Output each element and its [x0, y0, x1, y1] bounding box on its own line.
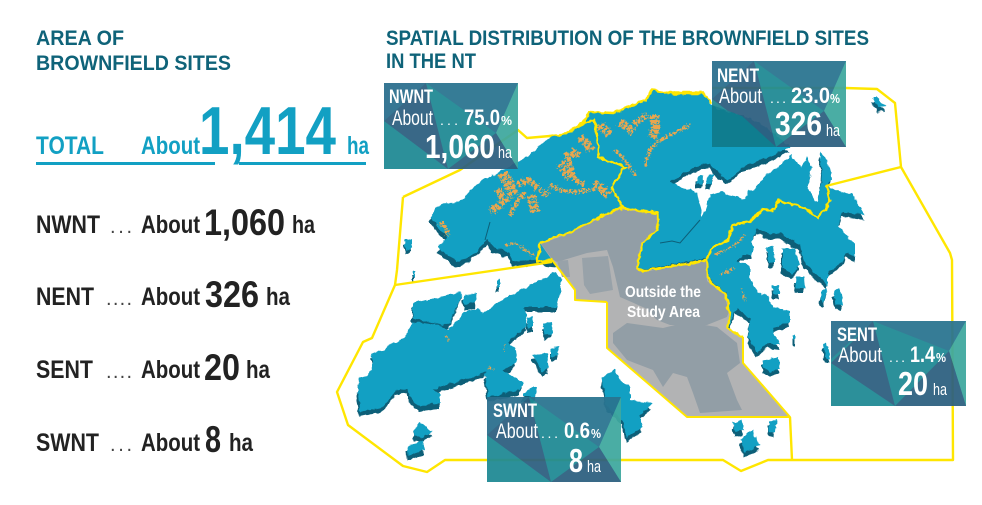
callout: NWNT: ...	[440, 112, 458, 128]
list row: NWNT: NWNT	[36, 211, 100, 239]
list row: SWNT: About	[141, 429, 201, 457]
map: area outside the study area	[540, 208, 790, 417]
callout: NWNT: %	[501, 113, 512, 128]
callout: SENT: %	[936, 350, 946, 365]
callout: NENT: About	[719, 85, 762, 108]
list row: NENT: About	[141, 283, 201, 311]
list row: NWNT	[36, 202, 316, 243]
total area figure: About	[141, 132, 201, 160]
list row: SENT: ....	[106, 361, 132, 383]
list row: SENT: About	[141, 356, 201, 384]
callout: SWNT	[487, 397, 621, 482]
callout: NWNT	[384, 83, 518, 169]
callout: NENT: 326	[775, 105, 822, 142]
list row: NWNT: ...	[110, 216, 132, 238]
map: land with shadow	[356, 90, 886, 461]
callout: SENT: About	[838, 344, 882, 367]
total area figure: 1,414	[199, 93, 336, 169]
list row: SENT: SENT	[36, 356, 93, 384]
map: inner rough yellow boundaries	[537, 90, 830, 337]
list row: SENT: ha	[246, 356, 271, 384]
callout: SWNT: About	[496, 420, 538, 443]
list row: NENT: 326	[205, 274, 259, 315]
callout: NENT: ...	[770, 90, 786, 106]
callout: NWNT: 1,060	[425, 128, 495, 165]
callout: SENT: 1.4	[910, 342, 936, 367]
callout: NENT: NENT	[717, 65, 759, 87]
callout: NENT: ha	[826, 121, 840, 140]
callout: SENT: 20	[898, 365, 928, 402]
list row: SENT	[36, 347, 271, 388]
callout: NENT	[712, 61, 846, 147]
list row: NENT: NENT	[36, 283, 94, 311]
callout: SWNT: 0.6	[564, 418, 590, 443]
map: brownfield site speckles	[440, 115, 745, 370]
list row: NWNT: ha	[292, 211, 316, 239]
map of the New Territories	[337, 88, 953, 472]
callout: NENT: 23.0	[791, 83, 830, 108]
list row: SWNT: 8	[205, 419, 221, 460]
heading: area of brownfield sites: AREA OF	[36, 27, 124, 50]
list row: SWNT	[36, 419, 254, 460]
callout: SENT: SENT	[837, 324, 877, 346]
map: outer yellow boundaries	[337, 88, 953, 472]
list row: NENT: ha	[266, 283, 291, 311]
callout: SWNT: %	[591, 426, 601, 441]
heading: spatial distribution: IN THE NT	[386, 50, 476, 73]
callout: NWNT: ha	[498, 143, 512, 162]
callout: SENT: ...	[889, 349, 905, 365]
map label: outside the study area: Study Area	[627, 304, 700, 321]
list row: SENT: 20	[204, 347, 240, 388]
list row: SWNT: SWNT	[36, 429, 99, 457]
total area figure: TOTAL	[36, 132, 104, 160]
heading: area of brownfield sites: BROWNFIELD SITES	[36, 52, 231, 75]
heading: area of brownfield sites	[36, 27, 231, 75]
list row: SWNT: ha	[229, 429, 254, 457]
callout: NWNT: About	[392, 107, 433, 130]
callout: SWNT: ha	[587, 457, 601, 476]
callout: SENT	[831, 321, 966, 406]
map: drainage lines	[485, 220, 700, 243]
map label: outside the study area: Outside the	[625, 284, 701, 301]
heading: spatial distribution: SPATIAL DISTRIBUTION OF THE BROWNFIELD SITES	[386, 27, 869, 50]
list row: NWNT: About	[141, 211, 201, 239]
total area figure: ha	[347, 132, 370, 160]
callout: NWNT: NWNT	[389, 86, 433, 108]
total area figure	[36, 93, 370, 169]
callout: SWNT: ...	[541, 425, 558, 441]
callout: NWNT: 75.0	[464, 105, 500, 130]
list row: NENT	[36, 274, 291, 315]
callout: SWNT: 8	[569, 442, 583, 479]
map label: outside the study area	[625, 284, 701, 321]
callout: SWNT: SWNT	[493, 400, 537, 422]
list row: NENT: ....	[106, 288, 132, 310]
list row: SWNT: ...	[110, 434, 132, 456]
list row: NWNT: 1,060	[204, 202, 285, 243]
callout: SENT: ha	[933, 380, 947, 399]
heading: spatial distribution	[386, 27, 869, 73]
callout: NENT: %	[830, 91, 840, 106]
